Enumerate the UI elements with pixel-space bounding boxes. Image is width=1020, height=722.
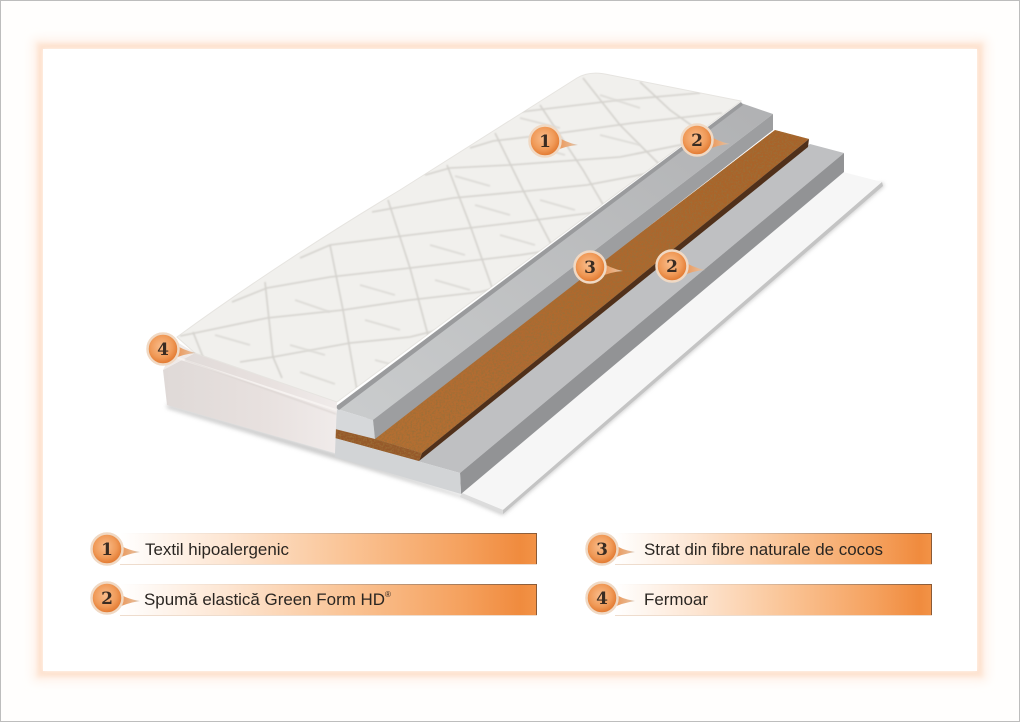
seams: [180, 78, 722, 396]
layer: side fabric with zipper: [163, 342, 337, 453]
ground shadow: [167, 182, 884, 515]
legend item 1: Textil hipoalergenic: [145, 541, 289, 559]
layer: quilted textile cover: [177, 73, 741, 402]
callout 2 on lower foam: 2: [666, 257, 678, 277]
callout 4 on zipper: 4: [157, 340, 169, 360]
wrinkles: [215, 95, 640, 384]
legend item 4: 4: [596, 589, 608, 609]
legend item 1: [92, 533, 537, 564]
callout 1 on textile: 1: [539, 132, 551, 152]
layer: coconut fibre: [335, 130, 809, 461]
legend item 3: [586, 533, 932, 564]
legend item 3: Strat din fibre naturale de cocos: [644, 541, 883, 559]
legend item 2: 2: [101, 589, 113, 609]
callout 3 on coconut: [574, 252, 623, 282]
layer: white bottom sheet: [460, 172, 883, 514]
legend item 3: 3: [596, 540, 608, 560]
callout 2 on lower foam: [656, 250, 705, 282]
layer: upper foam: [335, 102, 773, 439]
callout 3 on coconut: 3: [584, 258, 596, 278]
callout 2 on upper foam: [682, 124, 730, 156]
legend item 2: [92, 582, 537, 616]
legend item 1: 1: [101, 540, 113, 560]
callout 2 on upper foam: 2: [691, 131, 703, 151]
callout 1 on textile: [530, 126, 578, 156]
layer: lower foam: [335, 144, 844, 494]
callout 4 on zipper: [148, 334, 196, 364]
legend item 2: ®: [385, 590, 391, 599]
mattress cutaway illustration: [163, 73, 884, 515]
legend item 2: Spumă elastică Green Form HD: [144, 591, 385, 609]
legend item 4: [586, 582, 932, 616]
legend item 4: Fermoar: [644, 591, 709, 609]
